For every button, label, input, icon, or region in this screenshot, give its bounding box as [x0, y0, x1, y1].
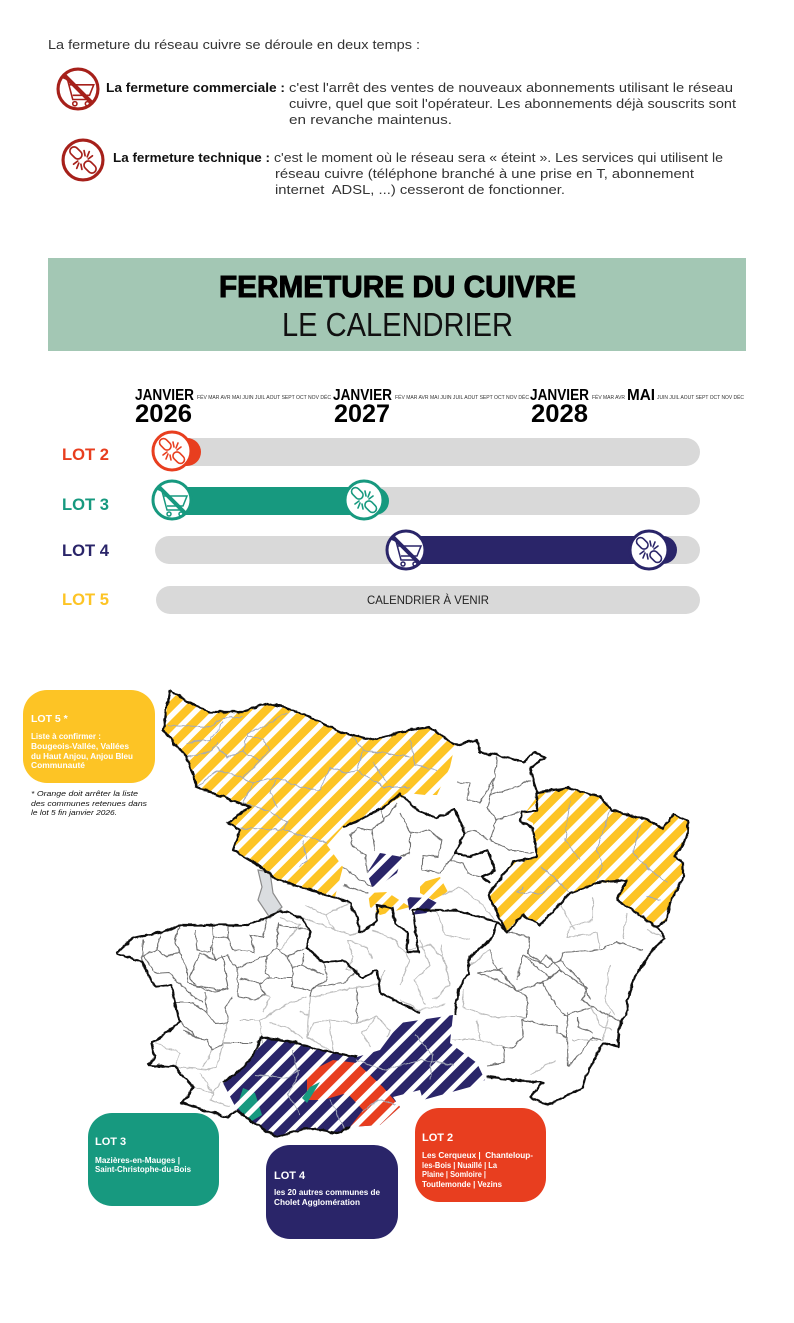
- block: technical closure: [63, 140, 723, 197]
- icon: broken link: [63, 140, 103, 180]
- technical closure description: réseau cuivre (téléphone branché à une prise en T, abonnement: [275, 166, 694, 181]
- card: lot 3: Saint-Christophe-du-Bois: [95, 1165, 192, 1174]
- technical closure label: La fermeture technique :: [113, 150, 270, 165]
- subtitle: LE CALENDRIER: [282, 306, 513, 343]
- territory boundaries bold: [117, 690, 688, 1137]
- commercial closure label: La fermeture commerciale :: [106, 80, 285, 95]
- icon: technical closure lot 4: [630, 531, 668, 569]
- timeline header: JANVIER: [135, 387, 194, 404]
- commune boundaries light: [155, 887, 665, 1107]
- block: commercial closure: [58, 69, 736, 127]
- card: lot 4: [266, 1145, 398, 1239]
- lot 3 areas: [237, 1082, 320, 1122]
- timeline header: MAI: [627, 387, 655, 404]
- commercial closure description: en revanche maintenus.: [289, 112, 452, 127]
- card: lot 3: LOT 3: [95, 1136, 126, 1148]
- timeline header: JANVIER: [530, 387, 589, 404]
- lot 5 footnote: le lot 5 fin janvier 2026.: [31, 808, 117, 817]
- card: lot 3: [88, 1113, 219, 1206]
- card: lot 4: Cholet Agglomération: [274, 1198, 360, 1207]
- timeline header: [135, 387, 744, 428]
- map of lots: [117, 690, 688, 1137]
- timeline row: lot 3: [62, 481, 700, 519]
- commune boundaries dark: [142, 757, 643, 1067]
- commercial closure description: [289, 80, 736, 127]
- card: lot 2: Les Cerqueux | Chanteloup-: [422, 1151, 533, 1160]
- lot 4 south area: [223, 1015, 485, 1137]
- intro text: La fermeture du réseau cuivre se déroule en deux temps :: [48, 37, 420, 52]
- icon: technical closure lot 3: [345, 481, 383, 519]
- card: lot 2: Plaine | Somloire |: [422, 1170, 486, 1179]
- card: lot 5: Communauté: [31, 761, 86, 770]
- timeline row: lot 5: CALENDRIER À VENIR: [367, 592, 489, 607]
- card: lot 2: LOT 2: [422, 1132, 453, 1144]
- lot 5 central patches: [368, 877, 448, 915]
- card: lot 5: Liste à confirmer :: [31, 732, 101, 741]
- icon: technical closure lot 2: [153, 432, 191, 470]
- lot 5 west area: [163, 690, 455, 897]
- lot 4 central patches: [367, 853, 437, 915]
- timeline row: lot 4: [62, 531, 700, 569]
- card: lot 5: Bougeois-Vallée, Vallées: [31, 742, 130, 751]
- title banner: [48, 258, 746, 351]
- timeline header: JANVIER: [333, 387, 392, 404]
- lot 5 footnote: [31, 789, 147, 817]
- timeline header: FÉV MAR AVR MAI JUIN JUIL AOUT SEPT OCT NOV DÉC: [395, 394, 529, 401]
- card: lot 2: les-Bois | Nuaillé | La: [422, 1161, 498, 1170]
- timeline row: lot 5: [62, 586, 700, 614]
- timeline header: 2028: [531, 400, 588, 428]
- communal lines inside lots: [167, 713, 667, 1130]
- commercial closure description: c'est l'arrêt des ventes de nouveaux abonnements utilisant le réseau: [289, 80, 733, 95]
- timeline header: JUIN JUIL AOUT SEPT OCT NOV DÉC: [657, 394, 744, 401]
- card: lot 3: Mazières-en-Mauges |: [95, 1156, 180, 1165]
- technical closure description: c'est le moment où le réseau sera « éteint ». Les services qui utilisent le: [274, 150, 723, 165]
- icon: commercial closure lot 3: [153, 481, 191, 519]
- card: lot 5: LOT 5 *: [31, 713, 69, 725]
- card: lot 2: Toutlemonde | Vezins: [422, 1180, 503, 1189]
- lot 2 area: [307, 1060, 400, 1127]
- card: lot 5: [23, 690, 155, 783]
- timeline header: 2027: [334, 400, 390, 428]
- card: lot 5: du Haut Anjou, Anjou Bleu: [31, 752, 133, 761]
- lot 5 footnote: * Orange doit arrêter la liste: [31, 789, 138, 798]
- loire river: [258, 870, 282, 918]
- timeline row: lot 4: LOT 4: [62, 541, 110, 560]
- timeline header: FÉV MAR AVR: [592, 394, 625, 401]
- technical closure description: [274, 150, 723, 197]
- timeline header: 2026: [135, 400, 192, 428]
- timeline row: lot 3: LOT 3: [62, 495, 109, 514]
- icon: no shopping cart: [58, 69, 98, 109]
- commercial closure description: cuivre, quel que soit l'opérateur. Les abonnements déjà souscrits sont: [289, 96, 736, 111]
- icon: commercial closure lot 4: [387, 531, 425, 569]
- card: lot 2: [415, 1108, 546, 1202]
- technical closure description: internet ADSL, ...) cesseront de fonctionner.: [275, 182, 565, 197]
- timeline row: lot 2: [62, 432, 700, 470]
- lot 5 east area: [488, 788, 688, 932]
- timeline row: lot 2: LOT 2: [62, 445, 109, 464]
- card: lot 4: LOT 4: [274, 1170, 306, 1182]
- card: lot 4: les 20 autres communes de: [274, 1188, 381, 1197]
- lot 5 footnote: des communes retenues dans: [31, 799, 147, 808]
- title: FERMETURE DU CUIVRE: [219, 269, 576, 304]
- timeline row: lot 5: LOT 5: [62, 590, 109, 609]
- timeline header: FÉV MAR AVR MAI JUIN JUIL AOUT SEPT OCT NOV DÉC: [197, 394, 331, 401]
